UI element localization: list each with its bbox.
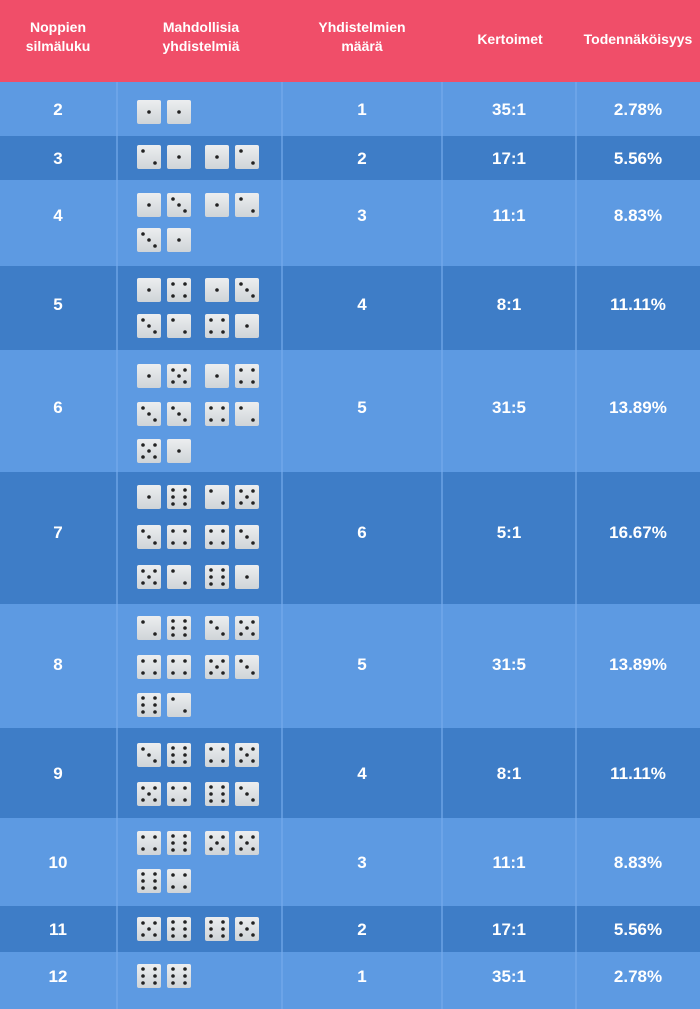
column: combination counts: 3	[357, 206, 367, 225]
column: sums: 2	[53, 100, 63, 119]
column: probability: 13.89%	[609, 655, 667, 674]
column: combination counts: 6	[357, 523, 367, 542]
header: yhdistelmiä	[162, 38, 240, 54]
column: probability	[609, 100, 667, 986]
column: combination counts	[357, 100, 367, 986]
column: odds: 35:1	[492, 967, 526, 986]
header: Noppien	[30, 19, 86, 35]
column: sums	[49, 100, 67, 986]
column: combination counts: 1	[357, 100, 367, 119]
header: määrä	[341, 38, 383, 54]
column: odds: 8:1	[497, 295, 521, 314]
column: probability: 5.56%	[614, 920, 662, 939]
column: probability: 11.11%	[610, 764, 666, 783]
column: odds: 17:1	[492, 149, 526, 168]
column: probability: 13.89%	[609, 398, 667, 417]
column: dice combinations	[137, 100, 259, 988]
column: odds: 11:1	[492, 853, 526, 872]
column: odds: 11:1	[492, 206, 526, 225]
header: Todennäköisyys	[584, 31, 693, 47]
column: combination counts: 4	[357, 295, 367, 314]
header: Yhdistelmien	[318, 19, 406, 35]
column: sums: 10	[49, 853, 67, 872]
column: probability: 11.11%	[610, 295, 666, 314]
column: sums: 9	[53, 764, 63, 783]
column: sums: 7	[53, 523, 63, 542]
header: silmäluku	[26, 38, 90, 54]
column: sums: 4	[53, 206, 63, 225]
column: sums: 6	[53, 398, 63, 417]
column: probability: 2.78%	[614, 100, 662, 119]
column: combination counts: 5	[357, 655, 367, 674]
column: combination counts: 2	[357, 149, 367, 168]
header: Kertoimet	[477, 31, 543, 47]
column: probability: 8.83%	[614, 206, 662, 225]
column: odds: 31:5	[492, 398, 526, 417]
column: combination counts: 4	[357, 764, 367, 783]
column: odds: 35:1	[492, 100, 526, 119]
column: sums: 11	[49, 920, 67, 939]
column: sums: 12	[49, 967, 67, 986]
column: sums: 8	[53, 655, 63, 674]
column: probability: 5.56%	[614, 149, 662, 168]
column: sums: 3	[53, 149, 63, 168]
column: odds: 8:1	[497, 764, 521, 783]
column: combination counts: 5	[357, 398, 367, 417]
column: probability: 16.67%	[609, 523, 667, 542]
column: combination counts: 3	[357, 853, 367, 872]
column: probability: 2.78%	[614, 967, 662, 986]
column: odds: 31:5	[492, 655, 526, 674]
header	[0, 0, 700, 82]
column: probability: 8.83%	[614, 853, 662, 872]
column: odds: 17:1	[492, 920, 526, 939]
header: Mahdollisia	[163, 19, 239, 35]
column: odds: 5:1	[497, 523, 521, 542]
column: combination counts: 1	[357, 967, 367, 986]
column: odds	[492, 100, 526, 986]
column: combination counts: 2	[357, 920, 367, 939]
column: sums: 5	[53, 295, 63, 314]
